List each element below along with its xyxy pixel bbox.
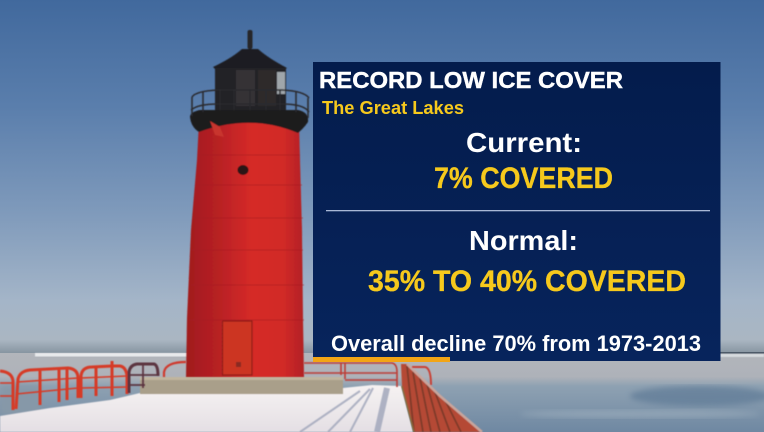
divider [326,210,710,211]
subtitle: The Great Lakes [322,98,464,118]
snow-covered pier [0,385,413,432]
value: current coverage: 7% COVERED [434,162,613,195]
tower body [186,122,304,378]
porthole [238,165,248,175]
background: frozen lake [0,352,764,432]
pier shadows [300,388,387,432]
panel background [313,62,720,361]
gallery deck [190,110,308,133]
right railing [401,364,482,432]
lantern room [215,68,286,112]
lighthouse [186,30,309,378]
footer statistic: Overall decline 70% from 1973-2013 [331,331,701,356]
value: normal coverage: 35% TO 40% COVERED [368,265,686,298]
left railing [0,361,397,410]
label: current: Current: [466,127,582,158]
lantern roof and finial [213,30,287,70]
concrete base [140,377,343,394]
title: RECORD LOW ICE COVER [319,67,623,93]
gallery railing [191,90,309,118]
label: normal: Normal: [469,225,578,256]
door [222,321,252,375]
accent bar [313,357,450,362]
panel: record low ice cover [313,62,720,362]
red flag detail [210,121,224,137]
